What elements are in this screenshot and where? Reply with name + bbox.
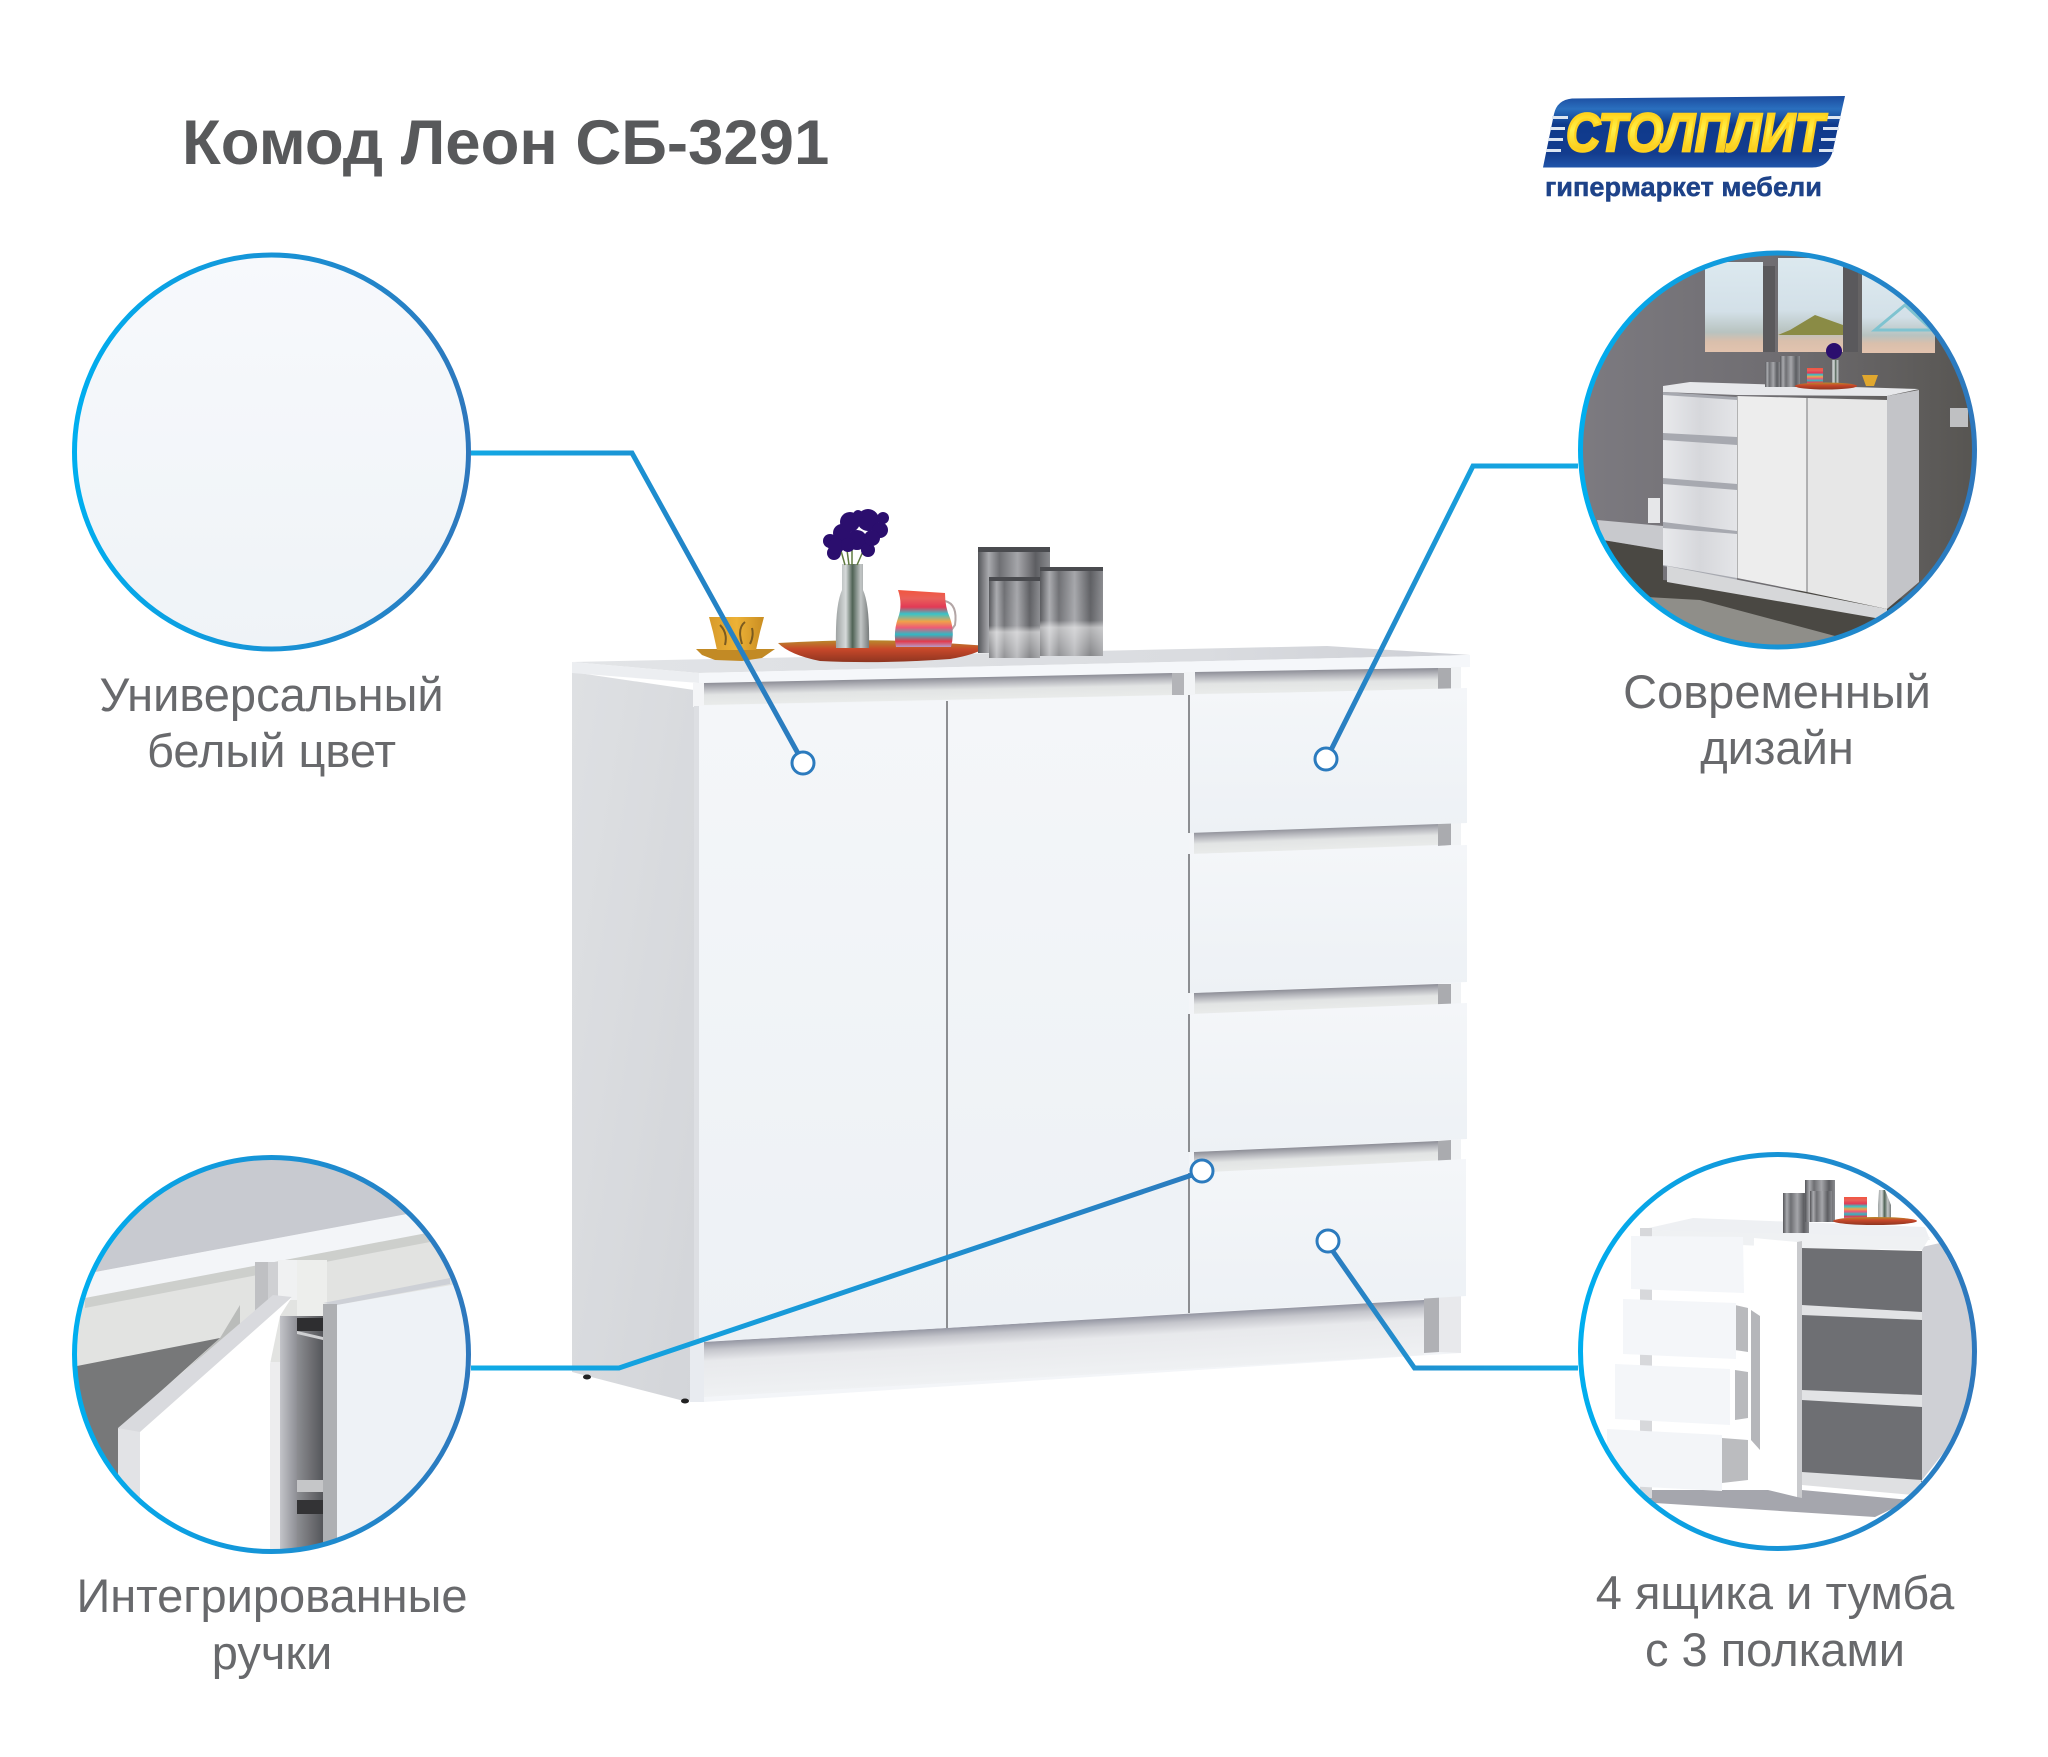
caption: ручки — [212, 1626, 332, 1679]
callout: white colour — [74, 255, 814, 777]
drawer 3 — [1189, 1003, 1467, 1152]
anchor dot — [1191, 1160, 1213, 1182]
logo: Столплит — [1543, 96, 1845, 202]
metal canister back — [978, 547, 1050, 653]
cabinet top surface — [572, 646, 1470, 673]
caption: Универсальный — [99, 668, 444, 721]
cup and saucer — [696, 617, 775, 661]
caption: с 3 полками — [1645, 1623, 1905, 1676]
caption: дизайн — [1700, 721, 1854, 774]
callout: drawers and shelves — [1317, 1150, 1985, 1676]
leader line — [471, 1174, 1195, 1368]
room photo circle — [1583, 256, 1972, 644]
cabinet ring — [1580, 1154, 1974, 1548]
swatch circle — [74, 255, 468, 649]
plinth — [704, 1300, 1424, 1397]
logo speed stripes — [1546, 116, 1841, 152]
leader line — [1332, 1250, 1578, 1368]
handle close-up circle — [77, 1160, 466, 1549]
caption: Интегрированные — [76, 1569, 468, 1622]
logo badge — [1543, 96, 1845, 168]
anchor dot — [792, 752, 814, 774]
right door — [947, 695, 1189, 1328]
door seam strip — [694, 706, 699, 1344]
logo wordmark: СТОЛПЛИТ — [1566, 103, 1827, 163]
metal canister front — [989, 577, 1040, 658]
drawer 2 — [1189, 845, 1467, 993]
anchor dot — [1317, 1230, 1339, 1252]
drawer 4 — [1190, 1159, 1466, 1313]
decor on top of the chest — [696, 509, 1103, 662]
anchor dot — [1315, 748, 1337, 770]
chest of drawers — [572, 646, 1470, 1404]
cabinet feet — [681, 1398, 689, 1404]
caption: 4 ящика и тумба — [1596, 1566, 1955, 1619]
vase with flowers — [823, 509, 889, 648]
handle gaps above drawers — [1194, 667, 1461, 1173]
leader line — [471, 453, 800, 757]
leader line — [1331, 466, 1578, 750]
logo tagline: гипермаркет мебели — [1545, 172, 1822, 202]
open cabinet circle — [1607, 1180, 1972, 1517]
handle gap above doors — [704, 673, 1172, 705]
cabinet side panel — [572, 672, 694, 1401]
left door — [699, 701, 947, 1342]
callout: integrated handles — [70, 1150, 1213, 1679]
title: Комод Леон СБ-3291 — [182, 108, 829, 178]
patterned pitcher — [895, 590, 956, 647]
caption: белый цвет — [147, 724, 396, 777]
handle ring — [74, 1158, 468, 1552]
caption: Современный — [1623, 665, 1931, 718]
cabinet body base — [694, 667, 1461, 1402]
metal canister right — [1040, 567, 1103, 656]
callout: modern design — [1315, 245, 1985, 774]
photo ring — [1580, 253, 1974, 647]
drawer 1 — [1189, 688, 1467, 833]
tray — [778, 640, 989, 662]
